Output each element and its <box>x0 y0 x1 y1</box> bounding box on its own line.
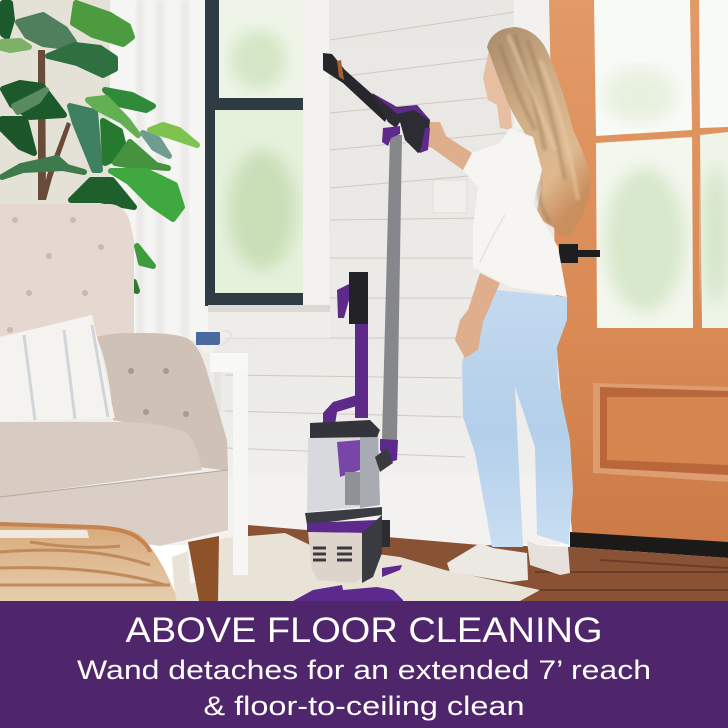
canister handle <box>323 396 355 422</box>
curtain <box>110 0 208 340</box>
vacuum cleaner <box>293 53 430 601</box>
foot pedal <box>382 565 402 577</box>
woven basket <box>0 522 177 601</box>
sneakers <box>447 543 528 582</box>
jeans <box>462 290 573 547</box>
plant trunk <box>38 50 71 200</box>
door handle <box>559 244 600 263</box>
upright purple tube <box>355 322 368 418</box>
clear dust bin <box>307 430 380 512</box>
teacup <box>195 331 231 353</box>
motor body <box>362 515 382 583</box>
chair arm <box>97 333 228 471</box>
door threshold <box>570 532 728 558</box>
chair front <box>0 470 228 546</box>
floor <box>200 525 728 601</box>
base ring <box>305 507 382 525</box>
chair seat <box>0 422 202 497</box>
canister top <box>310 420 380 438</box>
side table with cup <box>187 331 248 583</box>
sweater <box>463 128 567 297</box>
door <box>549 0 728 558</box>
chair leg <box>188 536 219 601</box>
armchair <box>0 204 228 601</box>
bottom banner <box>0 601 728 728</box>
striped pillow <box>0 315 115 422</box>
description line 2: & floor-to-ceiling clean <box>204 691 524 721</box>
forearm and hand <box>428 122 472 170</box>
woman <box>418 27 590 582</box>
background: shiplap wall <box>0 0 560 545</box>
wand nozzle <box>323 53 390 122</box>
wand handle <box>372 93 430 153</box>
flexible hose <box>382 135 402 440</box>
door lower panel <box>593 383 728 482</box>
door window panes <box>594 0 728 328</box>
floor head <box>293 585 403 601</box>
description line 1: Wand detaches for an extended 7’ reach <box>77 655 651 685</box>
rug <box>172 533 540 601</box>
window <box>205 0 330 338</box>
light switch plate <box>433 180 467 213</box>
hair <box>487 27 590 237</box>
plant <box>2 3 197 291</box>
heading: ABOVE FLOOR CLEANING <box>126 611 602 650</box>
lower arm and hand <box>455 273 500 358</box>
skin: face and neck <box>483 45 512 130</box>
purple band <box>307 520 377 533</box>
chrome motor cover <box>308 532 362 583</box>
hose connector <box>380 439 398 463</box>
